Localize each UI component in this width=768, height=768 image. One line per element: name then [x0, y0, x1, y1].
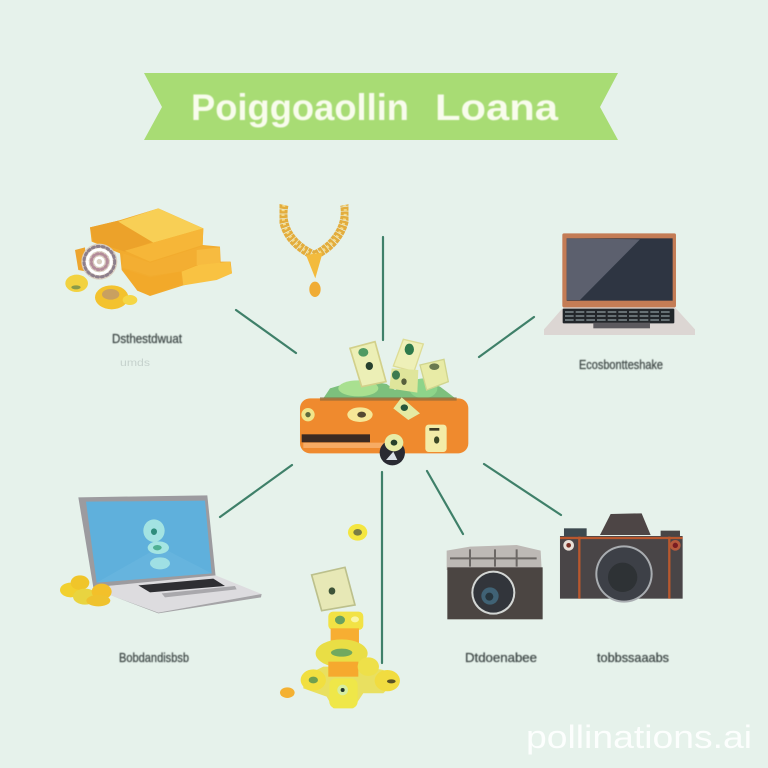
icon: DSLR camera: [560, 513, 683, 603]
title second word: Loana: [435, 87, 558, 128]
label: dark laptop: Ecosbontteshake: [579, 357, 663, 372]
title banner: [144, 73, 618, 140]
icon: silver laptop with blue screen: [60, 495, 262, 613]
icon: dark laptop: [544, 233, 695, 335]
spoke connectors: [220, 237, 561, 663]
icon: pile of gold coins with banknote: [280, 567, 400, 708]
icon: compact camera: [447, 545, 543, 619]
icon: gold necklace: [283, 205, 345, 297]
icon: orange wallet with banknotes: [300, 339, 468, 465]
title: Poiggoaollin: [191, 87, 409, 128]
label: silver laptop: Bobdandisbsb: [119, 650, 189, 665]
label: gold bars secondary: umds: [120, 358, 150, 369]
icon: gold bars: [65, 208, 232, 309]
icon: small gold coin: [348, 524, 367, 541]
watermark: pollinations.ai: [526, 719, 752, 755]
label: DSLR camera: tobbssaaabs: [597, 650, 669, 665]
label: gold bars: Dsthestdwuat: [112, 331, 182, 346]
label: compact camera: Dtdoenabee: [465, 650, 537, 665]
